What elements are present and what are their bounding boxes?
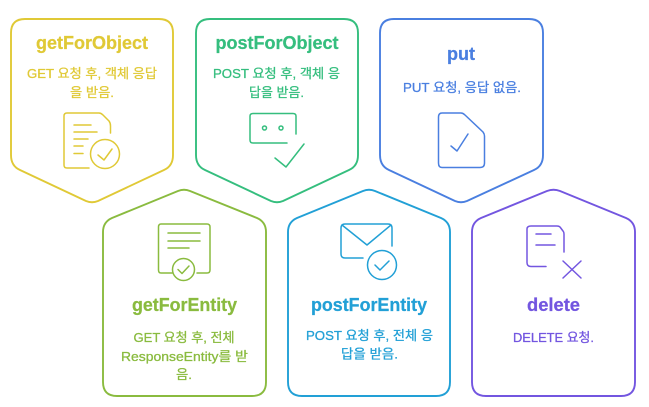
- text: getForObject description: GET 요청 후, 객체 응답: [27, 66, 157, 81]
- panel: getForObject: [11, 19, 173, 202]
- text: postForObject description: 답을 받음.: [249, 85, 304, 100]
- panel: postForObject: [196, 19, 358, 202]
- text: getForEntity description: GET 요청 후, 전체: [134, 330, 234, 345]
- text: getForObject description: 을 받음.: [70, 85, 114, 100]
- heading: postForObject: postForObject: [216, 33, 338, 53]
- text: getForEntity description: [121, 330, 248, 382]
- text: postForEntity description: [306, 328, 433, 362]
- text: getForEntity description: 음.: [176, 367, 192, 382]
- icon: document with cross: [527, 226, 581, 278]
- panel: getForEntity: [103, 190, 266, 396]
- text: postForEntity description: 답을 받음.: [341, 346, 398, 362]
- icon: envelope with check: [341, 224, 396, 280]
- heading: delete: delete: [527, 295, 580, 315]
- heading: put: put: [447, 44, 475, 64]
- panel: put: [380, 19, 543, 202]
- text: put description: PUT 요청, 응답 없음.: [403, 80, 521, 95]
- icon: certificate with check: [158, 224, 210, 280]
- text: postForObject description: POST 요청 후, 객체 응: [213, 66, 340, 81]
- text: getForEntity description: ResponseEntity를 받: [121, 349, 248, 364]
- text: postForObject description: [213, 66, 340, 100]
- text: delete description: DELETE 요청.: [513, 330, 594, 345]
- icon: message with check: [250, 114, 304, 167]
- heading: postForEntity: postForEntity: [311, 295, 427, 315]
- panel: postForEntity: [288, 190, 450, 396]
- text: postForEntity description: POST 요청 후, 전체 응: [306, 328, 433, 343]
- text: getForObject description: [27, 66, 157, 100]
- icon: file with check: [438, 113, 484, 168]
- icon: document with check: [64, 113, 120, 168]
- heading: getForEntity: getForEntity: [132, 295, 237, 315]
- heading: getForObject: getForObject: [36, 33, 148, 53]
- panel: delete: [472, 190, 635, 396]
